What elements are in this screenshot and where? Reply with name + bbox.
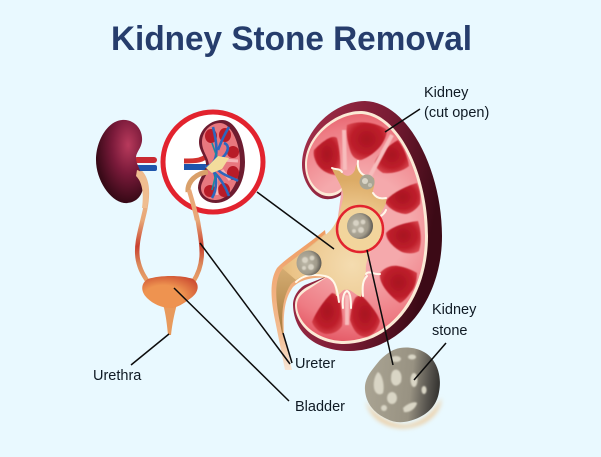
red ring magnifier	[163, 112, 263, 212]
ureter	[188, 172, 208, 192]
label: urethra: Urethra	[93, 368, 142, 384]
kidney body	[96, 120, 143, 203]
ureter top	[136, 170, 149, 208]
left ureters, bladder and urethra	[137, 172, 202, 335]
label: ureter: Ureter	[295, 356, 335, 372]
urethra tube	[163, 304, 177, 335]
pelvis	[206, 156, 229, 173]
label: bladder: Bladder	[295, 399, 345, 415]
big kidney stone	[365, 348, 441, 428]
leader lines	[131, 109, 446, 401]
vessels	[184, 153, 210, 161]
small stone in ureter	[296, 250, 322, 276]
kidney rim	[198, 120, 245, 203]
pyramids	[312, 122, 421, 337]
ureter lumen	[276, 234, 332, 333]
small whole kidney	[96, 120, 157, 208]
stone highlights	[374, 354, 426, 412]
red highlight circle with stone	[337, 206, 383, 252]
label: kidney cut open: (cut open)	[424, 105, 489, 121]
pink cortex	[297, 114, 425, 341]
kidney interior	[201, 123, 240, 200]
pyramids	[204, 128, 239, 197]
bladder	[142, 276, 198, 308]
title: Kidney Stone Removal	[111, 20, 472, 58]
blue and teal vessels	[205, 127, 238, 198]
label: kidney stone: stone	[432, 323, 467, 339]
label: kidney stone: Kidney	[432, 302, 476, 318]
stone body	[365, 348, 440, 422]
glow	[366, 398, 441, 428]
cream calyx edges	[296, 161, 386, 308]
renal pelvis	[282, 164, 386, 297]
big kidney cut open	[272, 101, 442, 370]
small stone upper	[360, 174, 374, 190]
cream membrane	[295, 111, 428, 344]
pink columns	[344, 130, 392, 325]
ureter outer wall	[272, 230, 332, 370]
renal artery and vein	[134, 157, 157, 163]
small cut kidney	[184, 120, 245, 220]
label: kidney cut open: Kidney	[424, 85, 468, 101]
pink columns	[216, 160, 238, 195]
outer capsule	[293, 101, 442, 351]
